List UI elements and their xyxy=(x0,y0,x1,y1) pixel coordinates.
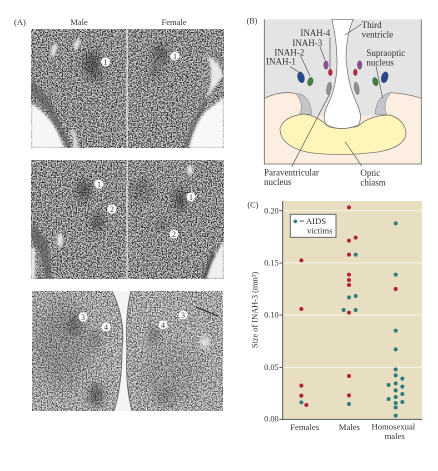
marker 1 female: 1 xyxy=(173,52,177,61)
marker 2 male: 2 xyxy=(110,205,114,214)
marker 2 female: 2 xyxy=(172,230,176,239)
marker 1 male xyxy=(101,58,110,67)
column heading: Male: Male xyxy=(70,17,88,27)
marker 2 male xyxy=(108,204,116,214)
INAH labels: INAH-3 xyxy=(292,38,323,48)
panel: micrograph row 2 xyxy=(31,160,224,279)
marker 4 male: 4 xyxy=(104,323,108,332)
column heading: Female: Female xyxy=(161,17,187,27)
gray tissue background xyxy=(264,19,421,116)
INAH labels xyxy=(264,20,405,188)
panel label C: (C) xyxy=(247,200,259,209)
panel: hypothalamus diagram B xyxy=(247,17,421,188)
INAH labels: nucleus xyxy=(264,177,292,187)
INAH labels: Supraoptic xyxy=(366,48,405,58)
panel: micrograph row 1 xyxy=(31,29,224,148)
marker 4 female xyxy=(158,320,168,330)
optic chiasm xyxy=(280,114,406,154)
third ventricle xyxy=(324,19,360,129)
INAH nuclei xyxy=(296,61,389,95)
y tick labels: 0.15 xyxy=(264,259,279,268)
marker 3 male: 3 xyxy=(81,313,85,322)
INAH labels: nucleus xyxy=(366,57,394,67)
x labels: Homosexual xyxy=(371,422,416,432)
INAH labels: Third xyxy=(362,20,382,30)
x labels: Females xyxy=(290,422,320,432)
INAH labels: INAH-2 xyxy=(274,47,304,57)
x labels: males xyxy=(385,431,405,441)
marker 1 male xyxy=(94,180,104,189)
y axis title: Size of INAH-3 (mm³) xyxy=(251,272,260,348)
teal data points xyxy=(299,221,404,418)
peach surrounding tissue xyxy=(264,90,421,164)
marker 2 female xyxy=(170,230,178,239)
axes xyxy=(283,201,422,419)
INAH labels: Paraventricular xyxy=(264,167,319,177)
supraoptic nucleus left xyxy=(295,93,312,115)
x labels: Males xyxy=(339,422,361,432)
marker 1 male: 1 xyxy=(97,180,101,189)
marker 3 male xyxy=(78,312,88,322)
panel: scatter chart C xyxy=(247,200,422,441)
legend: victims xyxy=(307,225,333,235)
y tick labels: 0.20 xyxy=(264,206,279,215)
INAH labels: ventricle xyxy=(362,29,393,39)
marker 1 female xyxy=(186,192,196,202)
INAH labels: chiasm xyxy=(360,178,386,188)
INAH labels: Optic xyxy=(360,168,380,178)
INAH labels: INAH-4 xyxy=(300,28,331,38)
plot background xyxy=(283,201,422,419)
panel: micrograph row 3 xyxy=(32,291,223,411)
panel label A: (A) xyxy=(14,17,26,27)
y tick labels: 0.05 xyxy=(264,363,279,372)
marker 1 female: 1 xyxy=(189,193,193,202)
y tick labels xyxy=(264,206,279,424)
marker 3 female xyxy=(178,310,188,320)
marker 4 male xyxy=(102,322,110,332)
y tick labels: 0.10 xyxy=(264,311,279,320)
legend xyxy=(290,214,336,237)
gridlines xyxy=(283,211,422,367)
legend: = AIDS xyxy=(299,216,326,226)
x labels xyxy=(290,422,416,441)
supraoptic nucleus right xyxy=(375,93,391,115)
marker 4 female: 4 xyxy=(161,321,165,330)
y tick labels: 0.00 xyxy=(264,415,279,424)
INAH labels: INAH-1 xyxy=(266,57,296,67)
marker 1 male: 1 xyxy=(104,58,108,67)
marker 3 female: 3 xyxy=(181,311,185,320)
red data points xyxy=(299,205,398,407)
panel label B: (B) xyxy=(247,17,258,26)
leader lines xyxy=(290,24,383,167)
outer frame xyxy=(264,19,421,164)
marker 1 female xyxy=(170,52,180,61)
